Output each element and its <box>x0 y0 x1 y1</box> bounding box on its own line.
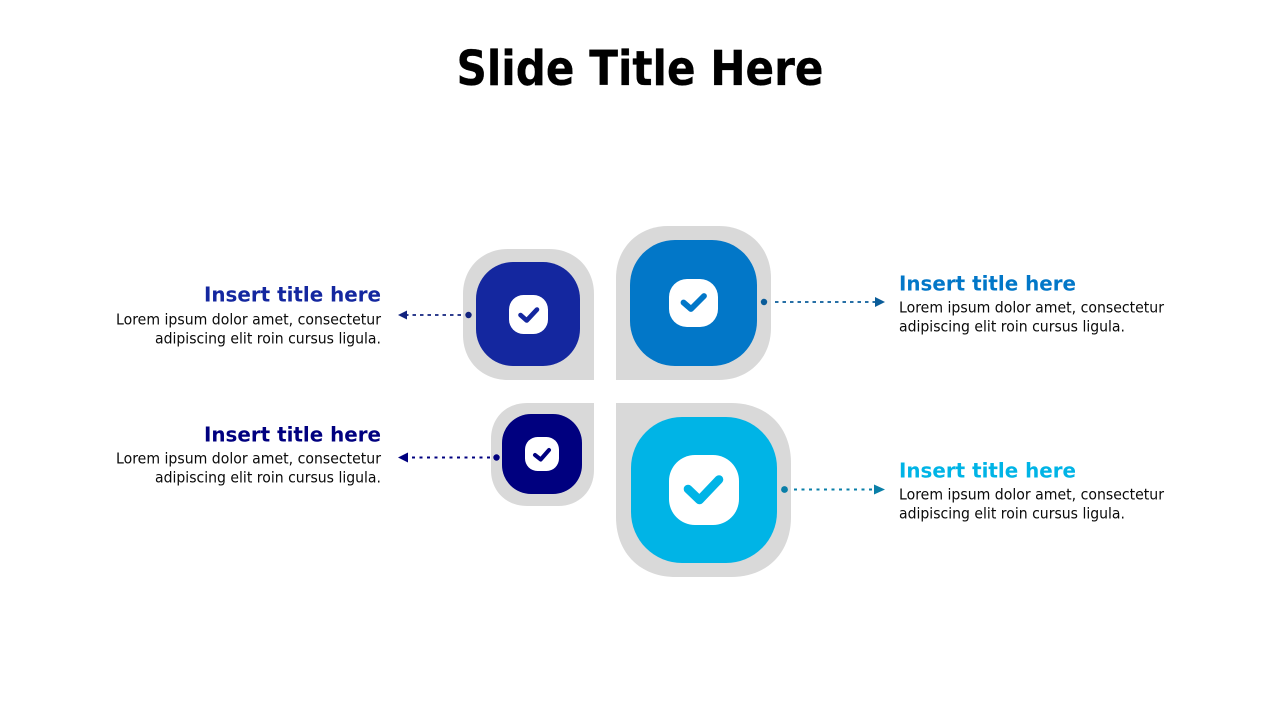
text block: bottom right: Insert title here <box>899 458 1076 482</box>
tile: bottom right <box>616 403 791 577</box>
text block: top left: adipiscing elit roin cursus ligula. <box>155 330 381 348</box>
arrow: bottom right <box>781 484 885 494</box>
text block: bottom right: adipiscing elit roin cursus ligula. <box>899 504 1125 522</box>
diagram: four rounded tiles <box>463 226 791 577</box>
text block: top left <box>116 282 382 348</box>
text block: bottom left: Lorem ipsum dolor amet, consectetur <box>116 450 382 468</box>
text block: top right: adipiscing elit roin cursus ligula. <box>899 318 1125 336</box>
arrow: top right <box>761 297 885 307</box>
text block: bottom left: Insert title here <box>204 422 381 446</box>
text block: top left: Lorem ipsum dolor amet, consectetur <box>116 310 382 328</box>
text block: top right <box>899 272 1165 336</box>
text block: bottom right: Lorem ipsum dolor amet, consectetur <box>899 486 1165 504</box>
tile: top right <box>616 226 771 380</box>
tile: top left <box>463 249 594 380</box>
tile: bottom left <box>491 403 594 506</box>
arrow: bottom left <box>398 452 500 462</box>
title: Slide Title Here <box>456 41 824 97</box>
text block: bottom left: adipiscing elit roin cursus ligula. <box>155 468 381 486</box>
arrow: top left <box>398 310 472 320</box>
text block: top left: Insert title here <box>204 282 381 306</box>
text block: top right: Lorem ipsum dolor amet, consectetur <box>899 298 1165 316</box>
text block: bottom right <box>899 458 1165 522</box>
text block: bottom left <box>116 422 382 486</box>
text block: top right: Insert title here <box>899 272 1076 296</box>
